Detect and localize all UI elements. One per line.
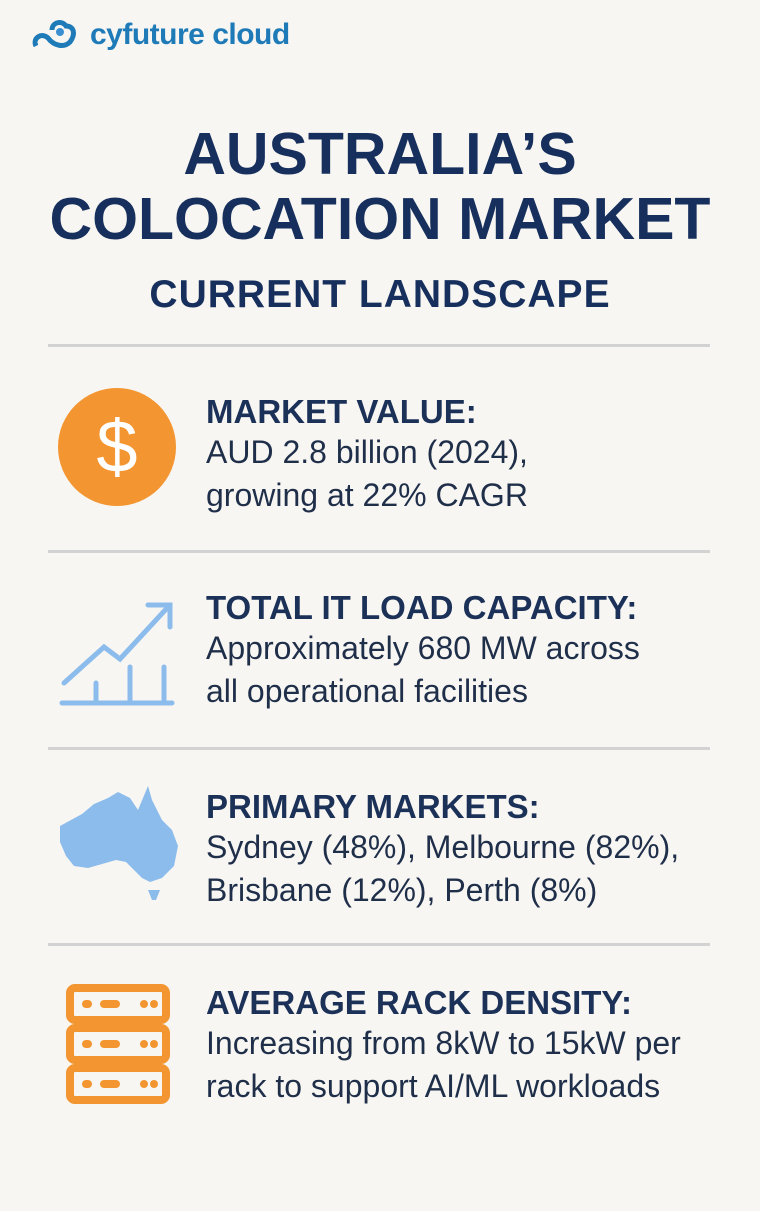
text: market value: AUD 2.8 billion (2024),: [206, 434, 528, 470]
text: primary markets: [206, 788, 679, 908]
text: market value: [206, 393, 528, 513]
text: primary markets: Brisbane (12%), Perth (8%): [206, 872, 597, 908]
icon: dollar: [58, 388, 176, 506]
text: primary markets: PRIMARY MARKETS:: [206, 788, 540, 825]
icon: australia map: [60, 786, 178, 900]
text: market value: MARKET VALUE:: [206, 393, 477, 430]
title: AUSTRALIA’S: [183, 121, 577, 187]
logo: cyfuture cloud: [90, 18, 290, 51]
item: market value: [58, 388, 528, 513]
text: rack density: [206, 984, 681, 1104]
text: market value: growing at 22% CAGR: [206, 477, 528, 513]
icon: chart: [60, 602, 174, 706]
text: IT load: TOTAL IT LOAD CAPACITY:: [206, 589, 637, 626]
item: primary markets: [60, 786, 679, 908]
text: primary markets: Sydney (48%), Melbourne (82%),: [206, 829, 679, 865]
text: rack density: Increasing from 8kW to 15kW per: [206, 1025, 681, 1061]
icon: server: [66, 984, 170, 1104]
text: IT load: all operational facilities: [206, 673, 528, 709]
subtitle: CURRENT LANDSCAPE: [149, 273, 611, 316]
text: IT load: Approximately 680 MW across: [206, 630, 640, 666]
title: COLOCATION MARKET: [50, 186, 710, 252]
item: rack density: [66, 984, 681, 1104]
item: IT load: [60, 589, 640, 709]
text: rack density: AVERAGE RACK DENSITY:: [206, 984, 632, 1021]
text: IT load: [206, 589, 640, 709]
icon: dollar: $: [96, 405, 138, 488]
title: [50, 121, 710, 252]
text: rack density: rack to support AI/ML workloads: [206, 1068, 660, 1104]
